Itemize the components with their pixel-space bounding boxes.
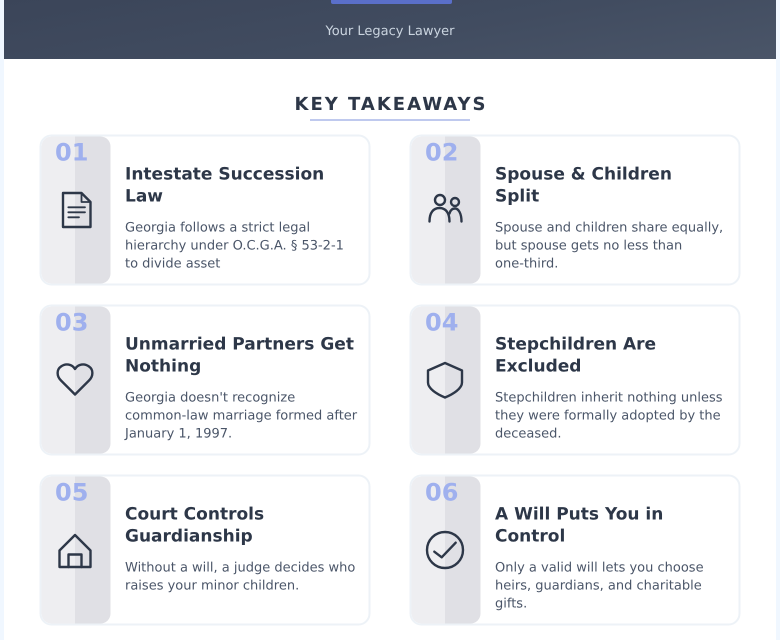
- description: but spouse gets no less than: [495, 238, 682, 253]
- description: [124, 390, 358, 441]
- header accent button: [331, 0, 452, 4]
- icon: heart: [56, 363, 94, 396]
- description: to divide asset: [125, 256, 220, 271]
- description: [125, 560, 355, 593]
- icon: people: [428, 194, 463, 223]
- description: [125, 220, 344, 271]
- description: [495, 560, 704, 611]
- title: Unmarried Partners Get: [125, 335, 354, 355]
- title: [125, 505, 264, 546]
- description: Georgia follows a strict legal: [125, 220, 310, 235]
- icon: check circle: [426, 530, 464, 570]
- description: Only a valid will lets you choose: [495, 560, 704, 575]
- heading: key takeaways: KEY TAKEAWAYS: [294, 94, 487, 115]
- title: Intestate Succession: [125, 165, 324, 185]
- card 03: unmarried partners get nothing: [40, 304, 370, 456]
- description: heirs, guardians, and charitable: [495, 578, 702, 593]
- title: Stepchildren Are: [495, 335, 656, 355]
- number 06: 06: [425, 478, 458, 506]
- description: Georgia doesn't recognize: [125, 390, 295, 405]
- card 04: stepchildren are excluded: [410, 304, 740, 456]
- title: Law: [125, 186, 163, 206]
- number 05: 05: [55, 478, 88, 506]
- description: gifts.: [495, 596, 527, 611]
- title: [495, 335, 656, 376]
- description: one-third.: [495, 256, 558, 271]
- title: [495, 165, 672, 206]
- heading underline: [310, 119, 470, 121]
- icon: house: [58, 534, 92, 568]
- description: Without a will, a judge decides who: [125, 560, 355, 575]
- icon: shield: [426, 362, 464, 399]
- title: Court Controls: [125, 505, 264, 525]
- description: [495, 220, 723, 271]
- title: Guardianship: [125, 526, 253, 546]
- description: Stepchildren inherit nothing unless: [495, 390, 723, 405]
- title: [125, 165, 324, 206]
- description: January 1, 1997.: [125, 426, 232, 441]
- number 02: 02: [425, 138, 458, 166]
- title: Control: [495, 526, 565, 546]
- title: Spouse & Children: [495, 165, 672, 185]
- card 06: a will puts you in control: [410, 474, 740, 626]
- number 04: 04: [425, 308, 458, 336]
- number 01: 01: [55, 138, 88, 166]
- title: A Will Puts You in: [495, 505, 663, 525]
- title: [125, 335, 354, 376]
- card 02: spouse and children split: [410, 134, 740, 286]
- title: Split: [495, 186, 539, 206]
- header band: [4, 0, 776, 59]
- title: [495, 505, 663, 546]
- description: raises your minor children.: [125, 578, 299, 593]
- tagline: Your Legacy Lawyer: [326, 24, 454, 39]
- card 01: intestate succession law: [40, 134, 370, 286]
- title: Nothing: [125, 356, 201, 376]
- description: [495, 390, 723, 441]
- title: Excluded: [495, 356, 581, 376]
- description: hierarchy under O.C.G.A. § 53-2-1: [125, 238, 344, 253]
- description: common-law marriage formed after: [125, 408, 357, 423]
- description: Spouse and children share equally,: [495, 220, 723, 235]
- description: deceased.: [495, 426, 562, 441]
- icon: document: [62, 192, 92, 228]
- description: they were formally adopted by the: [495, 408, 721, 423]
- number 03: 03: [55, 308, 88, 336]
- card 05: court controls guardianship: [40, 474, 370, 626]
